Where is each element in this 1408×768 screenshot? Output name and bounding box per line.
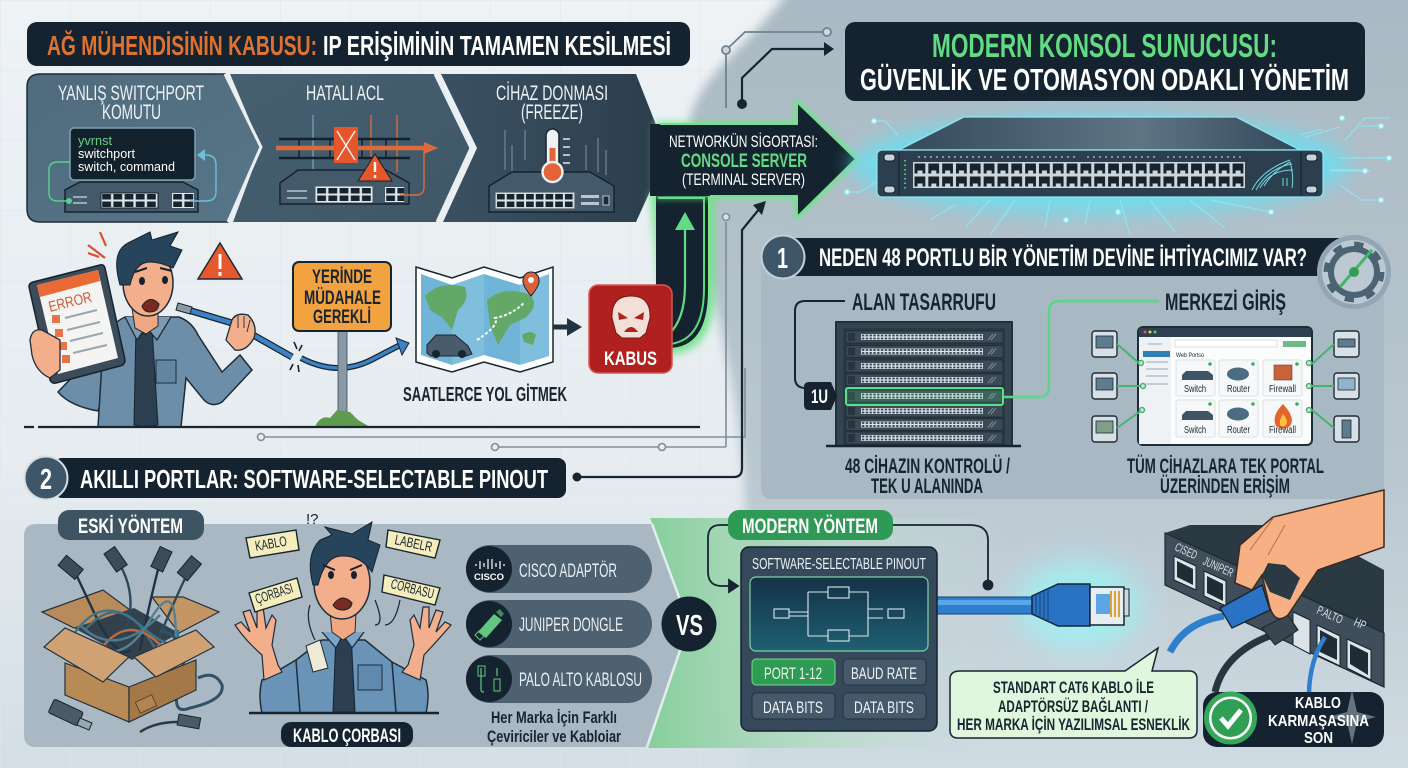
warning triangle (198, 243, 242, 279)
panel: wrong switchport (27, 74, 261, 222)
caption: different converters (487, 708, 621, 746)
caption: rack: 48 CİHAZIN KONTROLÜ / (845, 455, 1010, 478)
heading 2: smart ports (24, 456, 566, 500)
arrow to nightmare (553, 318, 582, 336)
heading 2: smart ports: 2 (40, 464, 52, 496)
map (416, 267, 553, 372)
device cards (1176, 360, 1302, 437)
connector lines top (722, 28, 834, 109)
device cards: Firewall (1269, 425, 1296, 436)
caption: portal: ÜZERİNDEN ERİŞİM (1160, 475, 1290, 498)
pill: Cisco adapter (466, 545, 652, 593)
caption: rack: TEK U ALANINDA (871, 475, 983, 498)
panel: wrong switchport: KOMUTU (102, 101, 161, 124)
VS badge (662, 596, 716, 652)
badge: cable soup: KABLO ÇORBASI (293, 726, 401, 747)
tablet (29, 265, 125, 383)
title: nightmare: IP ERİŞİMİNİN TAMAMEN KESİLMESİ (323, 30, 671, 61)
portal window (1138, 327, 1312, 445)
badge: end of cable clutter: SON (1304, 730, 1333, 747)
big arrow: console server: CONSOLE SERVER (681, 151, 807, 172)
label: hours of driving: SAATLERCE YOL GİTMEK (403, 383, 567, 406)
setting buttons: BAUD RATE (851, 664, 917, 683)
cable labels: LABELR (393, 531, 434, 555)
sign: on-site intervention: GEREKLİ (313, 307, 371, 328)
lower U of the arrow (650, 196, 712, 352)
callout: standard cat6: ADAPTÖRSÜZ BAĞLANTI / (998, 697, 1148, 716)
big arrow: console server: NETWORKÜN SİGORTASI: (669, 132, 818, 151)
cable glow (1017, 563, 1141, 647)
panel: software-selectable pinout (741, 547, 937, 731)
pill: Juniper dongle: JUNIPER DONGLE (519, 615, 623, 636)
nightmare badge: KABUS (604, 349, 657, 370)
panel: software-selectable pinout: SOFTWARE-SELECTABLE PINOUT (752, 556, 926, 573)
panel: device freeze: (FREEZE) (521, 101, 583, 124)
sign: on-site intervention: YERİNDE (312, 267, 372, 288)
pill: Cisco adapter: CISCO (474, 572, 504, 582)
illustration: hand plugging cable: P.ALTO (1315, 603, 1345, 627)
1U tag: 1U (811, 387, 828, 408)
badge: modern method: MODERN YÖNTEM (742, 515, 878, 538)
panel: why 48 ports (761, 235, 1391, 499)
engineer with tablet (29, 232, 292, 427)
callout: standard cat6: STANDART CAT6 KABLO İLE (993, 678, 1154, 697)
setting buttons: PORT 1-12 (764, 664, 822, 683)
pill: Palo Alto cable: PALO ALTO KABLOSU (519, 670, 642, 691)
caption: different converters: Her Marka İçin Farklı (491, 708, 617, 727)
VS badge: VS (676, 610, 703, 642)
hand with broken cable (178, 307, 292, 357)
ground line and connectors (24, 201, 766, 482)
heading: space saving: ALAN TASARRUFU (852, 289, 996, 316)
illustration: cable box (42, 546, 222, 732)
badge: old method: ESKİ YÖNTEM (78, 515, 183, 538)
head (132, 305, 158, 334)
panel: wrong switchport: switch, command (78, 159, 175, 174)
cable to map (290, 338, 409, 372)
big arrow: console server (650, 102, 856, 217)
panel: wrong switchport: yvrnst (78, 133, 112, 148)
modern method connectors (708, 525, 992, 592)
badge: end of cable clutter: KARMAŞASINA (1268, 713, 1369, 730)
illustration: confused engineer (235, 522, 451, 713)
cable labels: CORBASU (389, 575, 436, 602)
panel: device freeze: CİHAZ DONMASI (496, 82, 608, 105)
setting buttons: DATA BITS (854, 698, 914, 717)
device cards: Router (1227, 384, 1251, 395)
illustration: hand plugging cable (1165, 490, 1384, 692)
console server device (877, 117, 1323, 197)
sign: on-site intervention: MÜDAHALE (304, 288, 381, 309)
heading: central login: MERKEZİ GİRİŞ (1165, 289, 1286, 316)
caption: different converters: Çeviriciler ve Kabloiar (487, 727, 621, 746)
panel: faulty ACL: HATALI ACL (306, 82, 384, 105)
body (58, 345, 106, 411)
big arrow: console server: (TERMINAL SERVER) (682, 171, 805, 189)
pill: Juniper dongle (466, 600, 652, 648)
caption: portal (1127, 455, 1324, 498)
engineer with tablet: ERROR (47, 289, 94, 316)
panel: wrong switchport: switchport (78, 146, 135, 161)
badge: old method (58, 510, 204, 540)
panel: device freeze (441, 74, 662, 222)
device cards: Firewall (1269, 384, 1296, 395)
portal window: Web Portso (1176, 353, 1205, 359)
1U tag (804, 382, 837, 410)
device cards: Switch (1184, 425, 1206, 436)
blue patch cable (937, 584, 1129, 626)
callout: standard cat6 (950, 648, 1197, 738)
badge: cable soup (281, 722, 413, 747)
badge: modern method (728, 510, 893, 540)
heading 1 (762, 236, 1339, 278)
cable labels: ÇORBASI (253, 580, 295, 607)
caption: rack (845, 455, 1010, 498)
cable labels: KABLO (254, 533, 288, 554)
sign: on-site intervention (293, 262, 391, 427)
setting buttons: DATA BITS (763, 698, 823, 717)
panel: wrong switchport: YANLIŞ SWITCHPORT (58, 82, 204, 105)
setting buttons (752, 659, 926, 719)
pinout diagram (750, 577, 928, 651)
adapter pills (466, 545, 652, 703)
panel: old method (24, 510, 689, 747)
panel: modern green background (648, 518, 1000, 748)
panel: failure causes band (27, 74, 662, 222)
badge: end of cable clutter: KABLO (1295, 695, 1341, 712)
pill: Cisco adapter: CISCO ADAPTÖR (519, 561, 617, 582)
cable labels (246, 511, 440, 612)
callout: standard cat6: HER MARKA İÇİN YAZILIMSAL ESNEKLİK (957, 715, 1190, 734)
badge: end of cable clutter (1203, 690, 1384, 747)
title: modern console server (845, 22, 1365, 101)
heading 2: smart ports: AKILLI PORTLAR: SOFTWARE-SELECTABLE PINOUT (80, 464, 548, 494)
icon: gear and gauge (1317, 235, 1391, 309)
title: nightmare: AĞ MÜHENDİSİNİN KABUSU: (47, 30, 317, 61)
device cards: Router (1227, 425, 1251, 436)
title: nightmare (27, 22, 690, 66)
illustration: hand plugging cable: CISED (1173, 540, 1200, 562)
rack (795, 301, 1159, 446)
devices connected to portal (1092, 331, 1359, 442)
cable labels: !? (306, 511, 319, 528)
illustration: hand plugging cable: JUNIPER (1201, 554, 1236, 580)
panel: faulty ACL (230, 74, 471, 222)
device cards: Switch (1184, 384, 1206, 395)
nightmare badge (589, 285, 672, 373)
heading 1: 1 (777, 243, 788, 275)
pill: Palo Alto cable (466, 655, 652, 703)
illustration: hand plugging cable: HP (1352, 615, 1368, 633)
glowing circuit traces (844, 115, 1392, 235)
